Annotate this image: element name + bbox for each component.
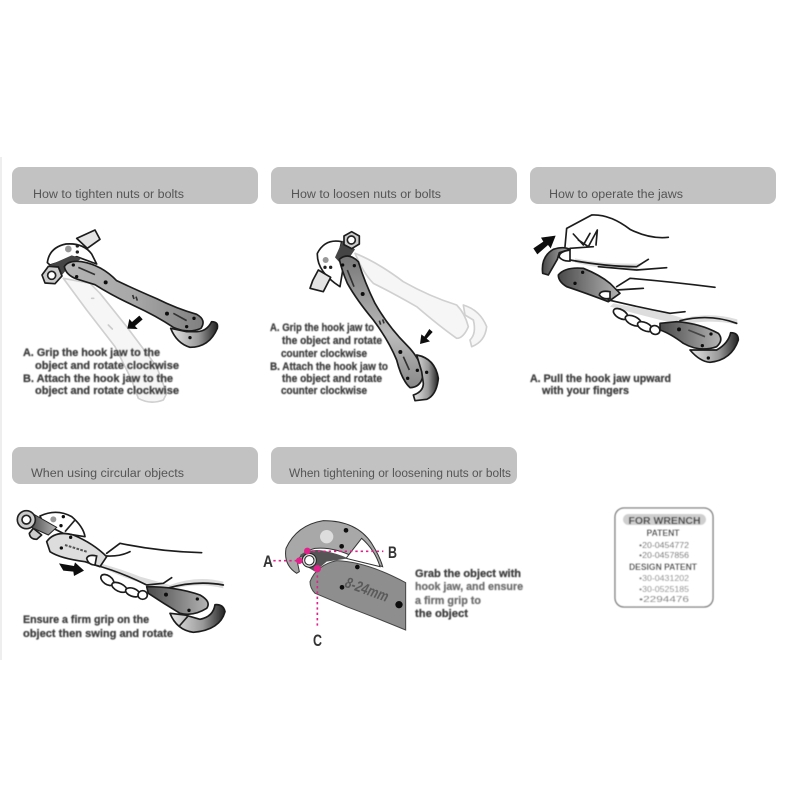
hook jaw bbox=[171, 322, 218, 347]
illustration: gripping a circular object bbox=[17, 511, 225, 632]
patent numbers: PATENT bbox=[646, 528, 680, 538]
patent numbers: •30-0431202 bbox=[639, 573, 689, 583]
caption: circular objects: object then swing and rotate bbox=[23, 628, 173, 640]
caption: loosen: A. Grip the hook jaw to bbox=[270, 322, 374, 334]
arrow bbox=[533, 236, 556, 254]
wrench body lower bbox=[660, 322, 721, 349]
patent numbers: •20-0454772 bbox=[639, 540, 689, 550]
object jaw bbox=[47, 244, 97, 265]
panel: circular objects bbox=[12, 447, 258, 640]
caption: grab the object: Grab the object with bbox=[415, 568, 521, 580]
caption: loosen: counter clockwise bbox=[281, 348, 367, 360]
caption: operate: with your fingers bbox=[541, 385, 629, 397]
illustration: hands pulling the hook jaw bbox=[533, 215, 738, 362]
callout label B: B bbox=[388, 543, 397, 562]
heading: loosen bbox=[271, 167, 517, 204]
illustration: wrench tightening a nut bbox=[42, 230, 218, 402]
fingers bbox=[612, 306, 661, 336]
caption: loosen: the object and rotate bbox=[282, 335, 382, 347]
hook jaw bbox=[413, 355, 438, 401]
handle and hook bbox=[147, 587, 208, 614]
heading: tighten: How to tighten nuts or bolts bbox=[33, 189, 184, 201]
caption: tighten: B. Attach the hook jaw to the bbox=[23, 373, 173, 385]
ghost wrench bbox=[63, 278, 167, 402]
hand bbox=[107, 543, 202, 553]
panel: how to loosen bbox=[270, 167, 517, 401]
heading: tightening or loosening: When tightening or loosening nuts or bolts bbox=[289, 468, 511, 480]
wrench body bbox=[64, 261, 203, 331]
wrench body bbox=[47, 533, 107, 567]
wrench body upper bbox=[558, 268, 620, 302]
patent numbers: •20-0457856 bbox=[639, 550, 689, 560]
caption: tighten: A. Grip the hook jaw to the bbox=[23, 347, 160, 359]
caption: grab the object bbox=[415, 568, 523, 620]
caption: tighten bbox=[23, 347, 179, 397]
hexagon nut bbox=[42, 266, 62, 284]
object jaw bbox=[317, 241, 343, 287]
callout lines bbox=[273, 551, 383, 627]
heading: loosen: How to loosen nuts or bolts bbox=[291, 189, 441, 201]
illustration: close-up of jaw with contact points: 8-24mm bbox=[343, 574, 391, 606]
arrow bbox=[420, 329, 433, 344]
caption: tighten: object and rotate clockwise bbox=[35, 360, 179, 372]
callout label C: C bbox=[313, 631, 322, 650]
caption: grab the object: a firm grip to bbox=[415, 595, 481, 607]
panel: how to operate the jaws bbox=[530, 167, 776, 397]
hook jaw bbox=[542, 248, 570, 275]
patent numbers: •2294476 bbox=[639, 594, 689, 604]
patent box bbox=[615, 508, 713, 607]
illustration: close-up of jaw with contact points bbox=[273, 521, 406, 630]
illustration: wrench loosening a nut bbox=[310, 232, 487, 401]
heading: circular objects: When using circular objects bbox=[31, 468, 184, 480]
hexagon nut bbox=[344, 232, 359, 249]
object jaw bbox=[40, 512, 85, 537]
arrow bbox=[127, 316, 143, 329]
caption: operate bbox=[530, 373, 671, 397]
round object bbox=[17, 511, 35, 529]
patent numbers: •30-0525185 bbox=[639, 584, 689, 594]
caption: grab the object: the object bbox=[415, 608, 468, 620]
upper hand bbox=[565, 215, 668, 247]
caption: operate: A. Pull the hook jaw upward bbox=[530, 373, 671, 385]
caption: loosen: B. Attach the hook jaw to bbox=[270, 361, 388, 373]
heading: operate: How to operate the jaws bbox=[549, 189, 683, 201]
hook jaw lower bbox=[690, 333, 738, 362]
caption: loosen: counter clockwise bbox=[281, 385, 367, 397]
caption: circular objects bbox=[23, 614, 173, 640]
arrow bbox=[59, 562, 84, 576]
wrench body bbox=[339, 256, 423, 388]
patent numbers: DESIGN PATENT bbox=[629, 562, 697, 572]
heading: operate bbox=[530, 167, 776, 204]
panel: how to tighten bbox=[12, 167, 258, 402]
hook jaw bbox=[286, 521, 383, 573]
panel: tightening or loosening bbox=[263, 447, 523, 650]
heading: circular objects bbox=[12, 447, 258, 484]
caption: tighten: object and rotate clockwise bbox=[35, 385, 179, 397]
patent numbers bbox=[629, 528, 697, 604]
lower hand bbox=[617, 278, 715, 287]
heading: tighten bbox=[12, 167, 258, 204]
ghost wrench bbox=[355, 253, 468, 338]
hand shading bbox=[575, 258, 643, 269]
caption: loosen bbox=[270, 322, 388, 397]
fingers bbox=[99, 572, 147, 599]
caption: grab the object: hook jaw, and ensure bbox=[415, 581, 523, 593]
inner jaw teeth bbox=[300, 550, 348, 572]
caption: circular objects: Ensure a firm grip on the bbox=[23, 614, 149, 626]
heading: tightening or loosening bbox=[271, 447, 517, 484]
wrench body bbox=[310, 561, 406, 630]
callout label A: A bbox=[263, 552, 273, 571]
caption: loosen: the object and rotate bbox=[282, 373, 382, 385]
round object bbox=[302, 553, 316, 567]
patent heading pill: FOR WRENCH bbox=[628, 515, 700, 527]
